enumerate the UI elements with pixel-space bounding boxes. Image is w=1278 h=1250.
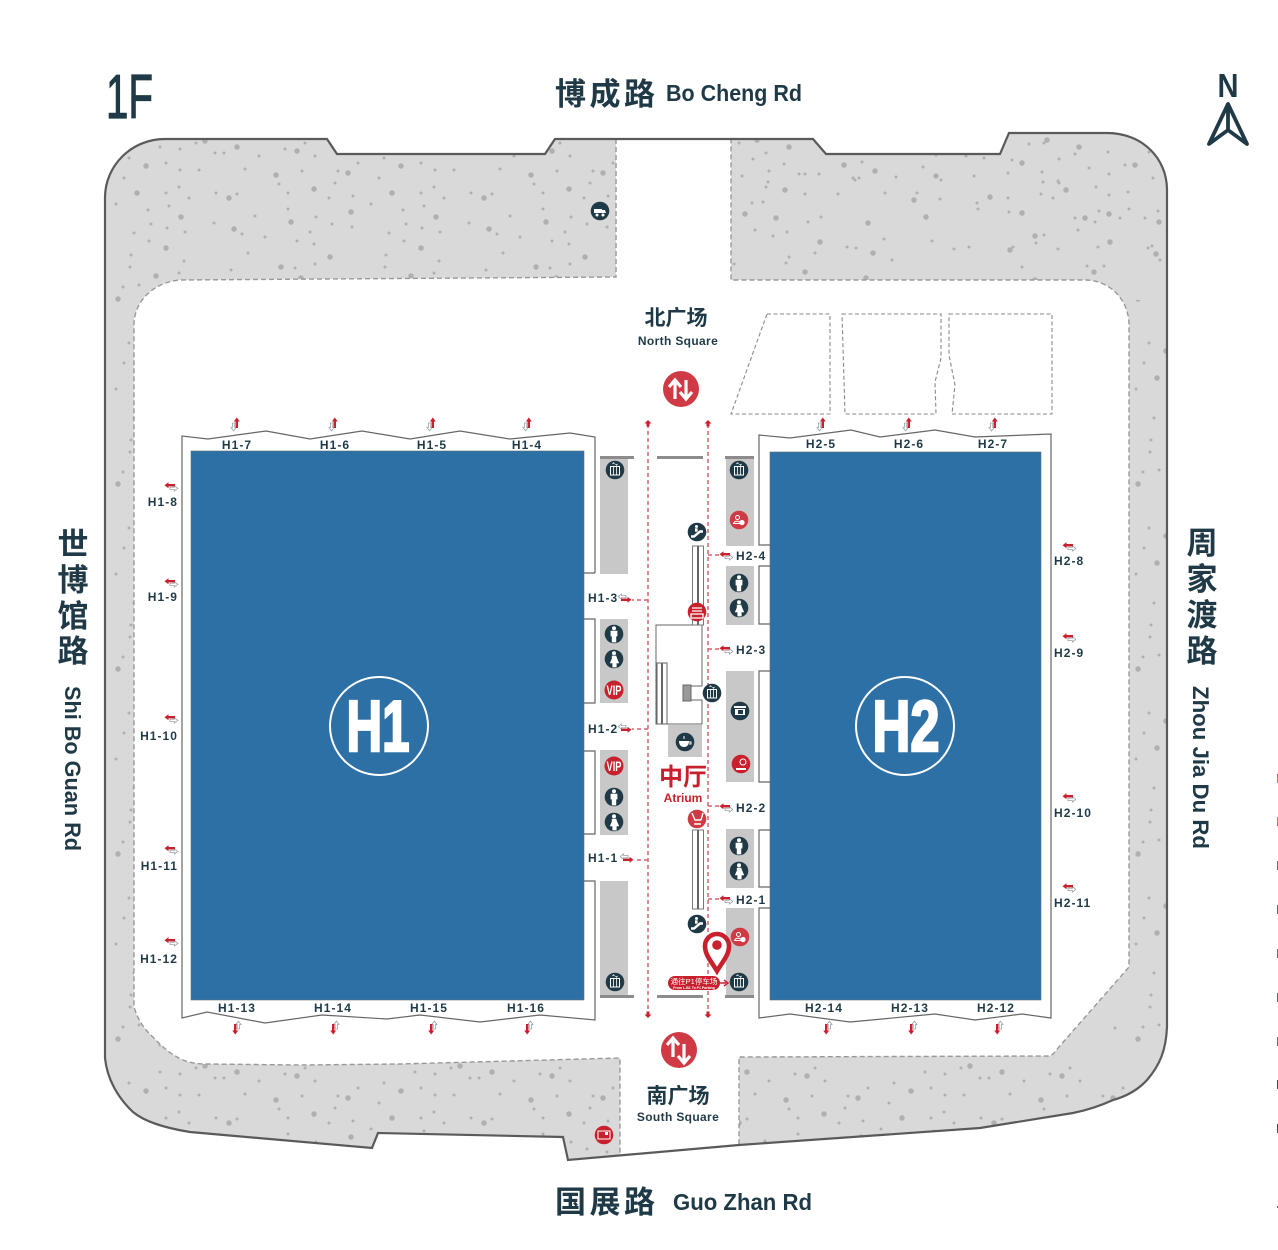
VIP room north — [604, 680, 624, 700]
east road name — [1186, 526, 1218, 849]
H2 door labels: H2-4 — [736, 549, 766, 563]
H2 door labels: H2-10 — [1054, 806, 1092, 820]
site ground: grey plaza with speckles — [100, 130, 1170, 1165]
north road name — [555, 77, 802, 112]
H1 door labels: H1-14 — [314, 1001, 352, 1015]
dark threshold bars — [600, 456, 754, 998]
H2 door labels: H2-5 — [806, 437, 836, 451]
H1 door labels: H1-1 — [588, 851, 618, 865]
north escalator — [692, 546, 704, 625]
VIP room south: VIP — [606, 758, 622, 774]
red dashed circulation routes — [632, 424, 720, 1014]
south square label: South Square — [637, 1110, 719, 1124]
hall H2 shell — [759, 430, 1051, 1022]
south road name — [555, 1185, 812, 1220]
north road name: Bo Cheng Rd — [666, 80, 802, 106]
H2 door labels: H2-6 — [894, 437, 924, 451]
H1 door labels: H1-15 — [410, 1001, 448, 1015]
H1 door labels — [140, 438, 618, 1015]
site outline — [105, 133, 1167, 1160]
H2 door labels: H2-12 — [977, 1001, 1015, 1015]
H2 door labels: H2-13 — [891, 1001, 929, 1015]
H1 door labels: H1-9 — [148, 590, 178, 604]
south road name: Guo Zhan Rd — [673, 1189, 812, 1215]
atrium label — [659, 764, 707, 805]
H1 door labels: H1-5 — [417, 438, 447, 452]
H1 door labels: H1-6 — [320, 438, 350, 452]
hall H2: H2 — [872, 687, 940, 767]
paved white interior of the site — [134, 139, 1129, 1155]
information point — [732, 755, 750, 773]
toilets — [605, 574, 748, 880]
south square label: 南广场 — [646, 1085, 710, 1108]
H2 door labels: H2-1 — [736, 893, 766, 907]
route arrowheads — [644, 420, 712, 1018]
atrium label: Atrium — [664, 791, 702, 805]
H2 door labels — [736, 437, 1092, 1015]
H2 door labels: H2-14 — [805, 1001, 843, 1015]
parking callout: 通往P1停车场 — [671, 976, 718, 986]
parking callout — [668, 976, 728, 990]
lifts — [606, 461, 748, 991]
H1 door labels: H1-12 — [140, 952, 178, 966]
east road name: 周家渡路 — [1186, 526, 1218, 669]
door arrows — [164, 418, 1076, 1034]
floor label 1F: 1F — [106, 63, 153, 132]
escalator icons — [688, 523, 706, 933]
north square label: North Square — [638, 334, 718, 348]
north square label — [638, 307, 718, 348]
south road name: 国展路 — [555, 1185, 655, 1220]
hall H1: H1 — [346, 687, 410, 767]
H1 door labels: H1-4 — [512, 438, 542, 452]
west road name: Shi Bo Guan Rd — [60, 686, 85, 851]
cropped marks at right edge — [1277, 774, 1278, 1208]
H1 door labels: H1-3 — [588, 591, 618, 605]
H1 door labels: H1-10 — [140, 729, 178, 743]
location pin — [705, 934, 729, 971]
H1 door labels: H1-7 — [222, 438, 252, 452]
west road name: 世博馆路 — [58, 527, 88, 669]
north square label: 北广场 — [644, 307, 708, 330]
north arrow: N — [1218, 67, 1238, 104]
H2 door labels: H2-11 — [1054, 896, 1091, 910]
VIP room south — [604, 756, 624, 776]
grey service blocks — [600, 457, 754, 996]
west road name — [58, 527, 88, 851]
south escalator — [692, 830, 704, 909]
H2 door labels: H2-7 — [978, 437, 1008, 451]
H1 door labels: H1-11 — [141, 859, 178, 873]
H1 door labels: H1-13 — [218, 1001, 256, 1015]
H2 door labels: H2-9 — [1054, 646, 1084, 660]
hall H2 — [770, 452, 1041, 1000]
ticket desk — [688, 603, 706, 621]
north arrow — [1209, 67, 1247, 144]
shop icon — [731, 702, 749, 720]
hall H1 shell — [182, 431, 595, 1023]
atrium core building — [656, 625, 702, 724]
trolley service — [688, 810, 706, 828]
atrium label: 中厅 — [659, 764, 707, 791]
north square exchange icon — [663, 371, 699, 407]
south plaza card icon — [595, 1126, 613, 1144]
south square label — [637, 1085, 719, 1124]
H1 door labels: H1-8 — [148, 495, 178, 509]
east road name: Zhou Jia Du Rd — [1188, 686, 1213, 849]
dashed outdoor zones — [731, 314, 1052, 414]
parking callout: From L-B1 To P1 Parking — [673, 986, 715, 990]
north road name: 博成路 — [555, 77, 655, 112]
delivery icon — [591, 202, 609, 220]
cafe icon — [676, 733, 694, 751]
VIP room north: VIP — [606, 682, 622, 698]
H1 door labels: H1-2 — [588, 722, 618, 736]
service desks — [730, 511, 749, 946]
hall H1 — [191, 451, 584, 1000]
H2 door labels: H2-3 — [736, 643, 766, 657]
south square exchange icon — [661, 1032, 697, 1068]
H2 door labels: H2-8 — [1054, 554, 1084, 568]
H2 door labels: H2-2 — [736, 801, 766, 815]
H1 door labels: H1-16 — [507, 1001, 545, 1015]
